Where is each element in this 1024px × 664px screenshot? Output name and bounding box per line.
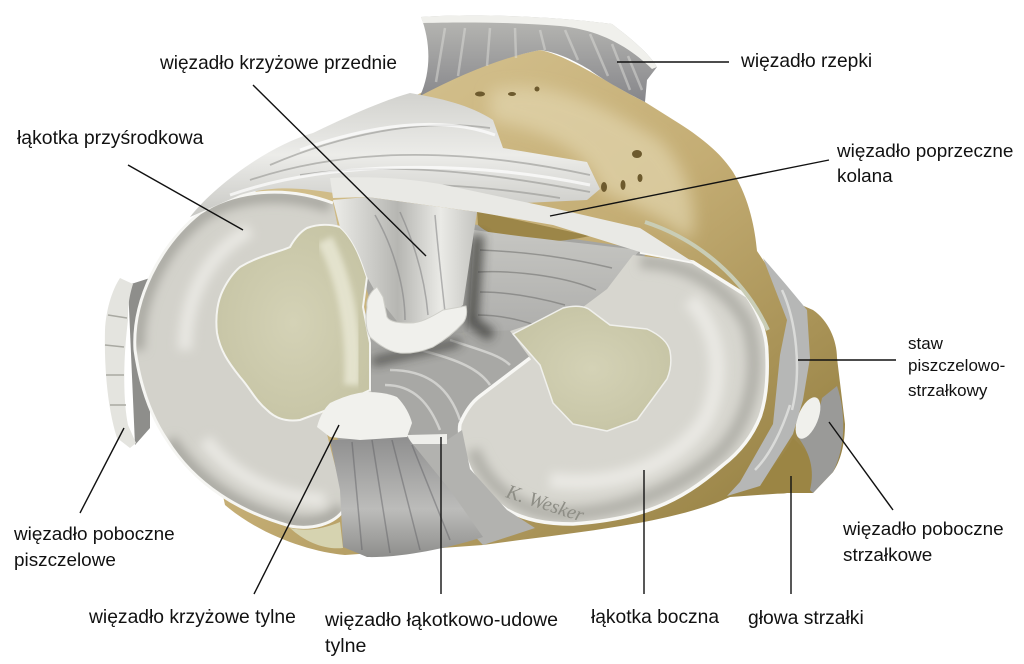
- tibiofibular joint capsule fibres: [727, 258, 810, 496]
- lateral tibial plateau: [513, 306, 671, 431]
- label: więzadło poprzeczne kolana: więzadło poprzeczne: [837, 141, 1013, 162]
- meniscus shaded ring: [473, 262, 754, 514]
- label: więzadło poboczne piszczelowe: piszczelowe: [14, 550, 116, 571]
- label: staw piszczelowo-strzałkowy: staw: [908, 334, 943, 353]
- medial meniscus: [135, 192, 372, 527]
- bone foramina: [475, 86, 642, 192]
- pale lateral rim band: [645, 222, 768, 330]
- anterior horn fibres: [190, 93, 600, 217]
- light fibre lines: [230, 124, 590, 195]
- label: więzadło łąkotkowo-udowe tylne: tylne: [325, 635, 366, 657]
- meniscus white rim: [135, 192, 345, 527]
- ligament stump: [790, 394, 826, 442]
- label: więzadło poboczne strzałkowe: więzadło poboczne: [843, 519, 1004, 540]
- label: więzadło krzyżowe przednie: więzadło krzyżowe przednie: [159, 53, 397, 74]
- small cream bone piece: [290, 522, 343, 548]
- label: więzadło poboczne piszczelowe: więzadło poboczne: [14, 524, 175, 545]
- ACL stump: [366, 287, 467, 353]
- label: głowa strzałki: głowa strzałki: [748, 608, 864, 629]
- leader lines: [80, 62, 896, 594]
- posterior meniscofemoral ligament: [407, 430, 535, 545]
- label: łąkotka przyśrodkowa: łąkotka przyśrodkowa: [17, 127, 204, 149]
- meniscus pale band: [185, 230, 325, 500]
- posterior cruciate ligament: [317, 392, 483, 557]
- fibular head: [755, 438, 813, 494]
- shadows in central recess: [372, 235, 492, 362]
- label: staw piszczelowo-strzałkowy: strzałkowy: [908, 381, 988, 400]
- posterior central fibres: [372, 330, 535, 440]
- anterior cruciate ligament: [333, 197, 477, 353]
- meniscus white rim: [459, 252, 767, 524]
- meniscus shaded rim: [138, 196, 342, 523]
- label: więzadło poboczne strzałkowe: strzałkowe: [843, 545, 932, 566]
- label: więzadło poprzeczne kolana: kolana: [837, 166, 893, 187]
- lateral meniscus: [459, 252, 767, 524]
- label: więzadło rzepki: więzadło rzepki: [740, 51, 872, 72]
- medial tibial plateau: [216, 225, 370, 421]
- patellar ligament: [420, 15, 657, 102]
- meniscus body: [459, 255, 767, 524]
- meniscus body: [135, 192, 372, 527]
- medial collateral ligament: [105, 278, 150, 448]
- dark fibre lines: [250, 125, 590, 198]
- PCL stump: [317, 392, 412, 440]
- label: staw piszczelowo-strzałkowy: piszczelowo-: [908, 356, 1005, 375]
- central fibre base: [330, 205, 650, 520]
- plateau white streaks: [325, 240, 353, 385]
- label: więzadło krzyżowe tylne: więzadło krzyżowe tylne: [88, 607, 296, 628]
- label: łąkotka boczna: łąkotka boczna: [591, 607, 719, 628]
- label: więzadło łąkotkowo-udowe tylne: więzadło łąkotkowo-udowe: [325, 609, 558, 631]
- anterior lateral horn fibres: [468, 230, 640, 340]
- ligament fibres: [436, 28, 642, 90]
- meniscus pale band: [550, 300, 717, 482]
- signature: K. Wesker: [503, 481, 587, 527]
- tan bone crescent below transverse ligament: [477, 211, 590, 242]
- fibular collateral ligament: [790, 386, 843, 493]
- ligament white rim: [421, 15, 657, 69]
- transverse ligament: [330, 177, 693, 262]
- bone: tibial plateau: [180, 50, 845, 555]
- bone highlight: [490, 86, 694, 240]
